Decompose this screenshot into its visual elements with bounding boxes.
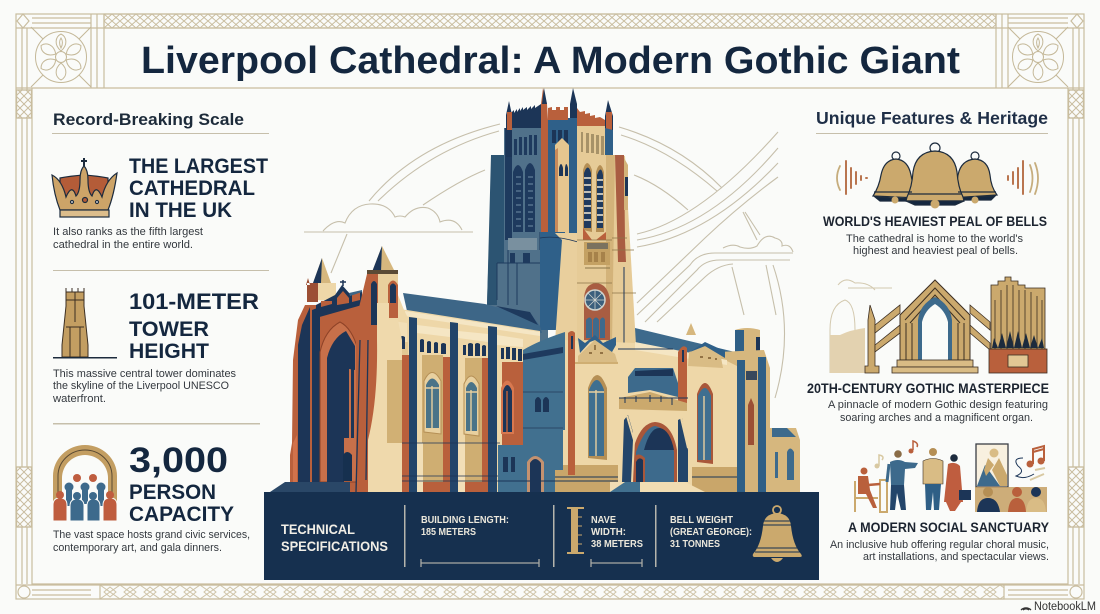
icon: arch with crowd <box>53 445 117 521</box>
gable <box>316 285 362 318</box>
background sketch lines <box>304 124 793 398</box>
text: fifth largest: It also ranks as the fifth largest <box>53 226 203 238</box>
porch dome <box>628 368 678 397</box>
spec: bell weight: 31 TONNES <box>670 538 720 550</box>
right wing <box>612 155 636 345</box>
heading: unique features: Unique Features & Heritage <box>816 108 1048 128</box>
cathedral illustration <box>270 88 800 492</box>
text: tower description <box>52 368 236 405</box>
feature: gothic masterpiece <box>807 381 1049 424</box>
spec: nave width: NAVE <box>591 514 616 526</box>
lower base <box>386 443 482 492</box>
text: tower description: the skyline of the Liverpool UNESCO <box>53 380 229 392</box>
watermark: NotebookLM: NotebookLM <box>1034 601 1096 613</box>
sand face <box>577 108 605 128</box>
right column: unique features and heritage <box>807 108 1049 563</box>
spec: nave width <box>591 514 643 567</box>
icon: bell <box>753 506 802 562</box>
icon: people and art <box>855 444 1047 512</box>
heading: record-breaking scale: Record-Breaking Scale <box>53 110 244 129</box>
stat: largest cathedral: THE LARGEST <box>129 155 268 178</box>
stat: largest cathedral: IN THE UK <box>129 199 232 222</box>
nave walls, west bays <box>386 308 540 492</box>
stat: largest cathedral: CATHEDRAL <box>129 177 255 200</box>
feature: social sanctuary <box>830 520 1049 563</box>
west transept <box>270 246 408 492</box>
stat: capacity: 3,000 <box>129 441 228 480</box>
heading: technical specifications: SPECIFICATIONS <box>281 538 388 554</box>
feature: heaviest peal: WORLD'S HEAVIEST PEAL OF BELLS <box>823 214 1047 229</box>
great west arch <box>320 322 358 482</box>
spec: building length <box>421 514 539 567</box>
text: fifth largest <box>53 226 203 251</box>
south chapel <box>498 332 565 492</box>
text: tower description: This massive central tower dominates <box>53 368 236 380</box>
icon: music notes <box>874 441 1045 480</box>
feature: social sanctuary: A MODERN SOCIAL SANCTUARY <box>848 520 1049 535</box>
icon: crown <box>52 158 117 217</box>
red body <box>290 305 386 492</box>
spec: nave width: WIDTH: <box>591 526 626 538</box>
spec: bell weight: (GREAT GEORGE): <box>670 526 752 538</box>
panel: technical specifications <box>264 492 819 580</box>
spec: building length: 185 METERS <box>421 526 476 538</box>
stat: tower height: TOWER <box>129 318 209 341</box>
feature: social sanctuary: An inclusive hub offering regular choral music, <box>830 539 1049 551</box>
lancet windows <box>424 372 441 434</box>
stat: capacity: PERSON <box>129 481 216 504</box>
stat: largest cathedral <box>129 155 268 222</box>
text: tower description: waterfront. <box>52 393 106 405</box>
clerestory windows <box>420 339 522 361</box>
bays lower tan band <box>555 465 737 492</box>
text: capacity description: The vast space hosts grand civic services, <box>53 529 250 541</box>
east nave wall <box>548 331 737 492</box>
icon: gothic arch and organ <box>830 277 1047 373</box>
stat: capacity: CAPACITY <box>129 503 234 526</box>
text: capacity description: contemporary art, and gala dinners. <box>53 542 222 554</box>
left column: record-breaking scale <box>52 110 269 554</box>
feature: gothic masterpiece: soaring arches and a magnificent organ. <box>840 412 1033 424</box>
heading: technical specifications <box>281 521 388 554</box>
feature: heaviest peal: highest and heaviest peal of bells. <box>853 245 1018 257</box>
centre blue face <box>548 118 577 240</box>
text: fifth largest: cathedral in the entire world. <box>53 239 193 251</box>
spec: building length: BUILDING LENGTH: <box>421 514 509 526</box>
spec: nave width: 38 METERS <box>591 538 643 550</box>
feature: heaviest peal <box>823 214 1047 257</box>
lower tower <box>540 232 565 330</box>
icon: peal of bells <box>873 143 997 208</box>
red strip <box>541 88 548 232</box>
stat: tower height: HEIGHT <box>129 340 209 363</box>
tower slate body <box>487 128 548 345</box>
red buttress <box>568 331 575 475</box>
text: capacity description <box>53 529 250 554</box>
windows <box>588 375 607 460</box>
central tower <box>487 88 636 350</box>
feature: gothic masterpiece: 20TH-CENTURY GOTHIC MASTERPIECE <box>807 381 1049 396</box>
icon: sound waves <box>837 161 1038 194</box>
icon: ruler <box>567 507 584 554</box>
title: Liverpool Cathedral: A Modern Gothic Giant <box>141 40 960 82</box>
wall tones <box>387 360 402 443</box>
feature: social sanctuary: art installations, and spectacular views. <box>863 551 1049 563</box>
stat: tower height <box>129 289 259 363</box>
stat: capacity <box>129 441 234 526</box>
porch arch <box>633 422 677 482</box>
feature: heaviest peal: The cathedral is home to the world's <box>846 233 1023 245</box>
left turret <box>313 258 331 283</box>
nave roof <box>403 293 542 333</box>
outer buttresses <box>298 307 320 492</box>
stat: tower height: 101-METER <box>129 289 259 314</box>
second tower <box>372 246 395 272</box>
spec: bell weight: BELL WEIGHT <box>670 514 734 526</box>
feature: gothic masterpiece: A pinnacle of modern Gothic design featuring <box>828 399 1048 411</box>
spec: bell weight <box>670 514 752 550</box>
east end and far roof <box>635 323 800 492</box>
icon: tower <box>53 288 117 358</box>
heading: technical specifications: TECHNICAL <box>281 521 355 537</box>
